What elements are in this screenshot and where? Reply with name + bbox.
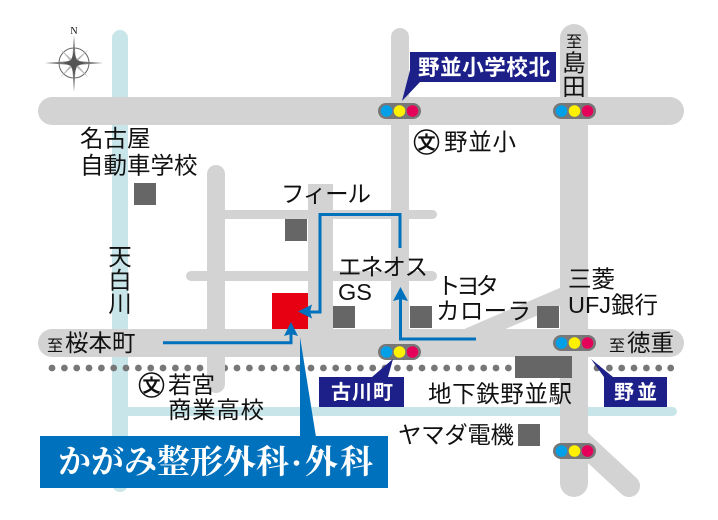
- traffic signal: Nonami: [553, 335, 596, 351]
- label: 至桜本町: 桜本町: [65, 330, 136, 356]
- label: 天白川: [108, 244, 132, 317]
- banner: clinic name: かがみ整形外科: [58, 444, 289, 481]
- callout: 古川町: 古川町: [331, 381, 393, 404]
- label: エネオスGS: [338, 254, 428, 305]
- river: Tempaku river: [112, 30, 677, 492]
- label: トヨタカローラ: トヨタ: [437, 273, 499, 299]
- label: 天白川: 白: [108, 268, 132, 294]
- label: 至徳重: 徳重: [627, 330, 674, 356]
- compass rose: [45, 26, 103, 92]
- school icon and label: 野並小: 文: [418, 133, 436, 153]
- school icon and label: 若宮商業高校: 若宮: [168, 372, 215, 398]
- traffic signal: Furukawacho: [378, 344, 421, 360]
- callout tail to clinic: [300, 337, 316, 437]
- label: 天白川: 川: [108, 291, 132, 317]
- label: トヨタカローラ: カローラ: [436, 298, 531, 324]
- label: 至島田: 島: [562, 50, 586, 76]
- label: ヤマダ電機: ヤマダ電機: [398, 422, 514, 448]
- label: 三菱UFJ銀行: 三菱: [568, 266, 615, 292]
- label: 名古屋自動車学校: [80, 126, 198, 178]
- school icon and label: 野並小: 野並小: [444, 129, 516, 155]
- label: 三菱UFJ銀行: [568, 266, 658, 318]
- label: エネオスGS: GS: [338, 279, 372, 305]
- callout: 野並: [591, 359, 667, 407]
- compass rose: N: [70, 26, 78, 37]
- traffic signal: Nonami elementary north: [378, 103, 421, 119]
- callout: 野並: 野並: [614, 381, 657, 404]
- callout: 野並小学校北: 野並小学校北: [418, 56, 550, 80]
- route arrow from west: [163, 322, 298, 343]
- label: 地下鉄野並駅: 地下鉄野並駅: [428, 381, 572, 407]
- school icon and label: 若宮商業高校: [140, 372, 264, 423]
- banner: clinic name: [40, 436, 388, 488]
- label: 至島田: 至: [566, 34, 582, 51]
- label: フィール: フィール: [281, 181, 371, 207]
- label: 至島田: 田: [562, 74, 586, 100]
- label: 三菱UFJ銀行: UFJ銀行: [568, 292, 658, 318]
- label: 至桜本町: 至: [47, 338, 63, 355]
- label: トヨタカローラ: [436, 273, 531, 324]
- clinic location: red square: [272, 293, 308, 329]
- railway: subway dotted line: [49, 365, 674, 371]
- label: エネオスGS: エネオス: [338, 254, 428, 280]
- traffic signal: south: [553, 443, 596, 459]
- callout: 野並小学校北: [402, 52, 556, 101]
- banner: clinic name: 外科: [305, 444, 373, 481]
- label: 名古屋自動車学校: 自動車学校: [80, 152, 198, 178]
- route arrow from east: [393, 287, 476, 339]
- label: 名古屋自動車学校: 名古屋: [80, 126, 150, 152]
- label: 天白川: 天: [108, 244, 132, 270]
- callout: 古川町: [319, 359, 404, 407]
- school icon and label: 若宮商業高校: 文: [142, 376, 160, 396]
- route arrow from north: [298, 214, 400, 318]
- landmark squares: [134, 183, 572, 446]
- label: 至島田: [562, 34, 586, 100]
- label: 至徳重: 至: [609, 338, 625, 355]
- traffic signal: north east: [553, 103, 596, 119]
- school icon and label: 若宮商業高校: 商業高校: [168, 397, 264, 423]
